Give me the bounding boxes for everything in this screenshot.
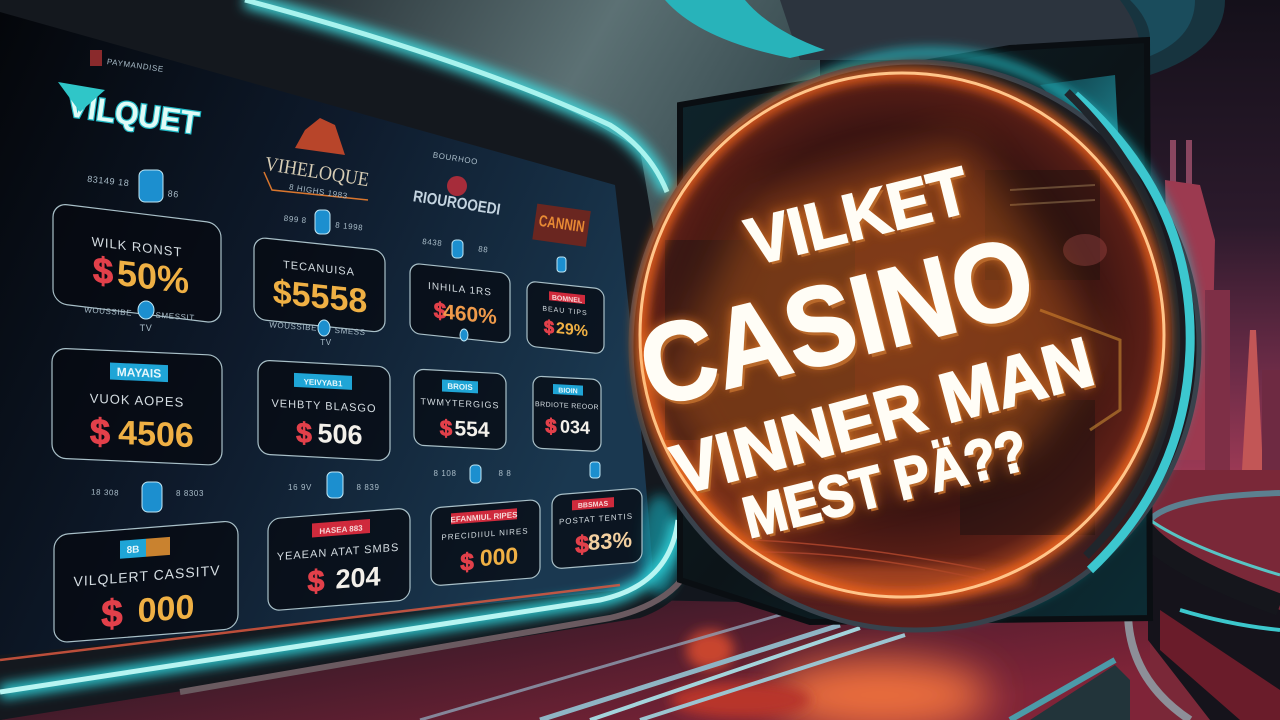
row captions with shield icons: [84, 170, 600, 512]
card row2 col2: [258, 360, 390, 461]
logo: Vilquet: [58, 50, 202, 141]
card row2 col2: 506: [317, 418, 363, 450]
card row3 col4: BBSMAS: [578, 501, 608, 510]
card row2 col4: BIOIN: [558, 387, 578, 395]
row captions with shield icons: 83149 18: [87, 174, 130, 188]
neon ring: [640, 73, 1164, 597]
headline: MEST PÄ??: [737, 417, 1034, 551]
card row2 col2: YEIVYAB1: [304, 377, 343, 388]
card row1 col4: [527, 281, 604, 354]
card row3 col2: YEAEAN ATAT SMBS: [277, 542, 399, 563]
card row1 col4: $: [544, 317, 554, 338]
casino offer cards: [52, 203, 642, 643]
card row1 col2: $5558: [273, 273, 367, 321]
row captions with shield icons: WOUSSIBE: [269, 320, 317, 333]
card row3 col4: 83%: [588, 527, 632, 555]
card row2 col1: MAYAIS: [117, 365, 161, 381]
card row3 col2: [268, 508, 410, 611]
round sign: [628, 40, 1199, 630]
headline: VINNER MAN: [667, 325, 1105, 512]
card row1 col1: 50%: [117, 252, 189, 302]
card row3 col3: EFANMIUL RIPES: [451, 510, 518, 524]
card row2 col2: $: [296, 417, 312, 449]
card row3 col1: $: [101, 593, 123, 636]
headline line: VINNER MAN: VINNER MAN: [664, 322, 1102, 509]
row captions with shield icons: 18 308: [91, 488, 119, 497]
card row2 col1: 4506: [118, 414, 194, 455]
row captions with shield icons: TV: [140, 323, 152, 333]
card row1 col4: BEAU TIPS: [542, 306, 588, 317]
card row1 col1: [53, 203, 221, 324]
card row2 col4: [533, 376, 601, 452]
logo: Vihelmodue: VIHELOQUE: [263, 153, 371, 191]
card row1 col3: INHILA 1RS: [428, 281, 492, 299]
logo: Vilquet: VILQUET: [66, 87, 202, 141]
floor light lines: [420, 612, 1130, 720]
logo: Vihelmodue: [263, 118, 371, 201]
card row2 col1: [52, 348, 222, 465]
card row1 col2: TECANUISA: [283, 259, 355, 279]
logo: Riouroden: BOURHOO: [432, 151, 479, 167]
logo: Casino banner: [532, 204, 591, 247]
row captions with shield icons: 8438: [422, 237, 443, 248]
sign backing plate: [680, 40, 1150, 622]
row captions with shield icons: SMESSIT: [155, 311, 195, 322]
card row2 col4: BRDIOTE REOOR: [535, 401, 599, 411]
sign rim: [631, 62, 1199, 630]
sign disc: [639, 72, 1165, 598]
card row2 col4: $: [545, 416, 557, 438]
card row3 col3: $: [460, 549, 474, 577]
icon: shields: [138, 170, 600, 512]
card row2 col3: TWMYTERGIGS: [421, 396, 499, 410]
row captions with shield icons: 8 1998: [335, 221, 364, 232]
card row2 col3: 554: [454, 417, 490, 442]
card row3 col1: VILQLERT CASSITV: [74, 562, 220, 589]
card row3 col2: HASEA 883: [319, 524, 363, 536]
row captions with shield icons: SMESS: [334, 326, 366, 337]
card row2 col3: BROIS: [447, 382, 473, 392]
bottom neon strip: [0, 520, 685, 692]
card row2 col4: 034: [560, 416, 590, 438]
display screen: [0, 0, 692, 720]
card row1 col2: [254, 237, 385, 333]
headline glow: [660, 140, 1100, 520]
card row1 col1: $: [93, 249, 113, 292]
row captions with shield icons: TV: [320, 338, 332, 347]
card row2 col3: $: [440, 415, 452, 441]
card row3 col1: 000: [138, 588, 194, 630]
card row3 col2: $: [308, 565, 325, 599]
balcony railing: [1128, 470, 1280, 720]
card row3 col3: [431, 499, 540, 586]
logo: Riouroden: [412, 151, 501, 219]
row captions with shield icons: 86: [167, 188, 179, 200]
row captions with shield icons: 8 108: [433, 469, 457, 478]
headline line: MEST PÄ??: MEST PÄ??: [737, 417, 1034, 551]
row captions with shield icons: 88: [478, 245, 489, 255]
headline: CASINO: [628, 213, 1046, 431]
row captions with shield icons: 16 9V: [288, 483, 312, 492]
card row2 col3: [414, 369, 506, 450]
sign outer glow: [668, 53, 1192, 617]
sign teal panel: [1040, 75, 1120, 170]
card row3 col3: PRECIDIIUL NIRES: [441, 526, 529, 542]
row captions with shield icons: 8 839: [356, 483, 380, 492]
card row3 col4: $: [575, 531, 589, 559]
headline: VILKET: [739, 152, 976, 279]
headline: CASINO: [631, 217, 1049, 435]
headline: [628, 152, 1105, 554]
headline: MEST PÄ??: [740, 420, 1037, 554]
top neon strip: [245, 0, 667, 192]
row captions with shield icons: 899 8: [283, 214, 307, 225]
headline: VINNER MAN: [664, 322, 1102, 509]
card row1 col1: WILK RONST: [92, 234, 182, 260]
headline: VILKET: [742, 155, 979, 282]
row captions with shield icons: 8 8: [499, 469, 511, 478]
logo: Riouroden: RIOUROOEDI: [412, 188, 501, 219]
card row1 col3: $: [434, 298, 446, 324]
logo: Vilquet: PAYMANDISE: [106, 57, 164, 74]
city skyline: [1165, 140, 1280, 470]
logo: Vihelmodue: 8 HIGHS 1983: [288, 182, 348, 201]
row captions with shield icons: WOUSSIBE: [84, 305, 132, 318]
card row1 col3: [410, 263, 510, 344]
card row2 col1: VUOK AOPES: [90, 391, 184, 410]
card row1 col4: 29%: [556, 319, 588, 340]
card row3 col4: POSTAT TENTIS: [559, 512, 633, 526]
card row3 col3: 000: [480, 542, 518, 571]
card row1 col4: BOMNEL: [552, 295, 583, 305]
logo: Casino banner: CANNIN: [538, 213, 586, 236]
card row3 col2: 204: [335, 561, 381, 595]
headline line: VILKET: VILKET: [739, 152, 976, 279]
card row3 col1: [54, 521, 238, 643]
card row2 col2: VEHBTY BLASGO: [271, 398, 377, 415]
disc inner machinery: [665, 170, 1120, 596]
card row3 col4: [552, 488, 642, 569]
headline line: CASINO: CASINO: [628, 213, 1046, 431]
card row1 col3: 460%: [443, 301, 497, 329]
row captions with shield icons: 8 8303: [176, 489, 204, 498]
card row3 col1: 8B: [127, 544, 139, 556]
card row2 col1: $: [90, 411, 110, 453]
top arch: [665, 0, 1225, 75]
